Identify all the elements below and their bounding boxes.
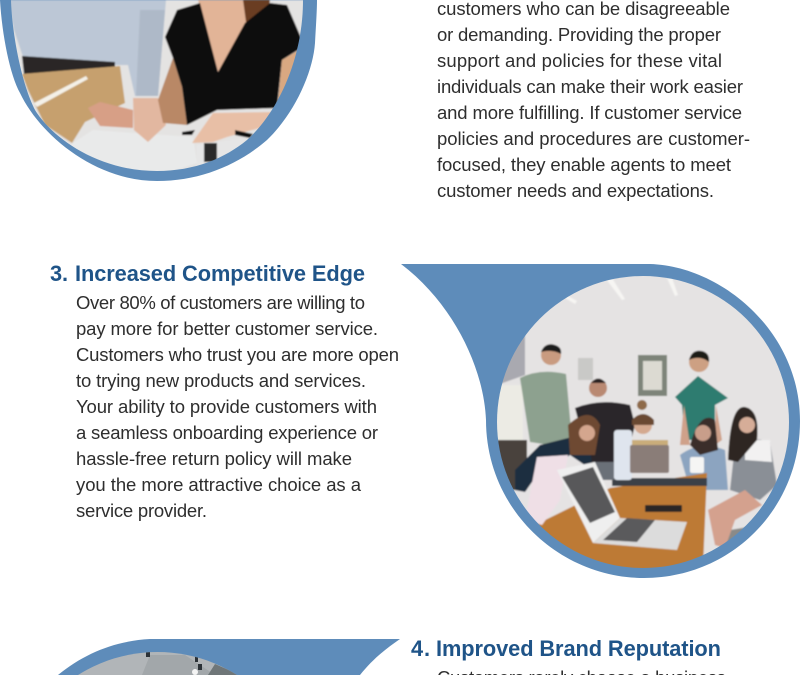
table (538, 472, 708, 568)
text block 3 (76, 292, 399, 521)
panel 4: photo with blue frame (58, 639, 400, 675)
standing man left (520, 372, 572, 445)
text block 3: Your ability to provide customers with (76, 396, 377, 417)
text block 3: Customers who trust you are more open (76, 344, 399, 365)
photo: two people reviewing documents (11, 0, 303, 171)
standing man right (675, 376, 728, 440)
heading 4: Improved Brand Reputation: Improved Brand Reputation (436, 636, 721, 661)
seated woman centre (632, 424, 652, 435)
text block 3: service provider. (76, 500, 207, 521)
text block 3: a seamless onboarding experience or (76, 422, 378, 443)
blue teardrop shape (401, 264, 800, 578)
blue shape (58, 639, 400, 675)
text block 2: individuals can make their work easier (437, 76, 743, 97)
heading 3: Increased Competitive Edge: 3. (50, 261, 68, 286)
text block 3: you the more attractive choice as a (76, 474, 362, 495)
photo: office ceiling (78, 652, 237, 675)
text block 2: policies and procedures are customer- (437, 128, 750, 149)
heading 3: Increased Competitive Edge: Increased Competitive Edge (75, 261, 365, 286)
photo: team around a laptop table (497, 276, 789, 568)
text block 3: Over 80% of customers are willing to (76, 292, 365, 313)
text block 2: customer needs and expectations. (437, 180, 714, 201)
seated woman left (515, 437, 592, 492)
seated women right (680, 446, 728, 490)
heading 4: Improved Brand Reputation: 4. (411, 636, 430, 661)
mug (690, 457, 704, 473)
man centre (575, 402, 635, 465)
text block 2: focused, they enable agents to meet (437, 154, 731, 175)
text block 2 (437, 0, 750, 201)
text block 3: to trying new products and services. (76, 370, 366, 391)
panel 3: photo with blue teardrop frame (401, 264, 800, 580)
text block 3: hassle-free return policy will make (76, 448, 352, 469)
blue frame shape (0, 0, 317, 181)
text block 2: and more fulfilling. If customer service (437, 102, 742, 123)
text block 2: or demanding. Providing the proper (437, 24, 721, 45)
front laptops (592, 462, 614, 480)
back laptop (630, 445, 669, 473)
water bottle (614, 430, 632, 480)
text block 3: pay more for better customer service. (76, 318, 378, 339)
text block 2: support and policies for these vital (437, 50, 722, 71)
panel 2: photo with blue frame (0, 0, 320, 181)
